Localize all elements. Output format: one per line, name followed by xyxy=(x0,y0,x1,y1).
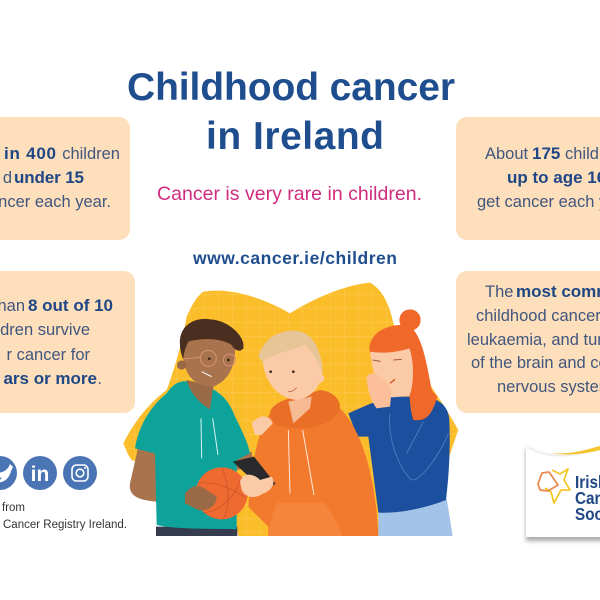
panel: 1 in 400 children: ncer each year. xyxy=(0,193,111,211)
boy in teal t-shirt xyxy=(130,319,253,536)
illustration: three teenagers xyxy=(123,283,458,536)
icon: instagram xyxy=(63,456,97,490)
panel: 1 in 400 children: in 400 xyxy=(4,144,56,163)
title xyxy=(127,66,455,158)
hand on shoulder xyxy=(252,416,273,435)
social media icons xyxy=(0,456,97,490)
source note: Cancer Registry Ireland. xyxy=(3,519,127,531)
website link: www.cancer.ie/children xyxy=(192,248,397,268)
girl xyxy=(348,309,453,536)
logo text xyxy=(575,472,600,524)
panel: most common cancers: The xyxy=(485,283,513,301)
hand with phone xyxy=(233,457,276,497)
title: in Ireland xyxy=(206,115,384,158)
panel: 175 children: About xyxy=(485,145,529,163)
panel: 8 out of 10 survive xyxy=(0,271,135,413)
icon: daffodil xyxy=(538,469,570,503)
source note xyxy=(2,502,127,531)
logo: Irish Cancer Society xyxy=(526,442,600,541)
subtitle: Cancer is very rare in children. xyxy=(157,183,422,205)
panel: 8 out of 10 survive: . xyxy=(97,370,102,388)
icon: twitter xyxy=(0,456,17,490)
panel: 1 in 400 children: children xyxy=(62,145,120,163)
panel: 8 out of 10 survive: r cancer for xyxy=(7,346,90,364)
panel: 8 out of 10 survive: dren survive xyxy=(0,321,90,339)
title: Childhood cancer xyxy=(127,66,455,109)
icon: linkedin: in xyxy=(31,463,49,486)
source note: from xyxy=(2,502,25,514)
panel: most common cancers xyxy=(456,271,600,413)
panel: 1 in 400 children: under 15 xyxy=(14,168,84,187)
panel: 1 in 400 children: d xyxy=(3,169,12,187)
yellow background shape xyxy=(123,283,458,536)
panel: 175 children: 175 xyxy=(532,144,560,163)
boy in orange hoodie xyxy=(248,331,378,536)
basketball xyxy=(196,467,248,519)
panel: 8 out of 10 survive: 8 out of 10 xyxy=(28,296,113,315)
panel: 175 children xyxy=(456,117,600,240)
panel: 8 out of 10 survive: ars or more xyxy=(3,369,97,388)
panel: 1 in 400 children xyxy=(0,117,130,240)
